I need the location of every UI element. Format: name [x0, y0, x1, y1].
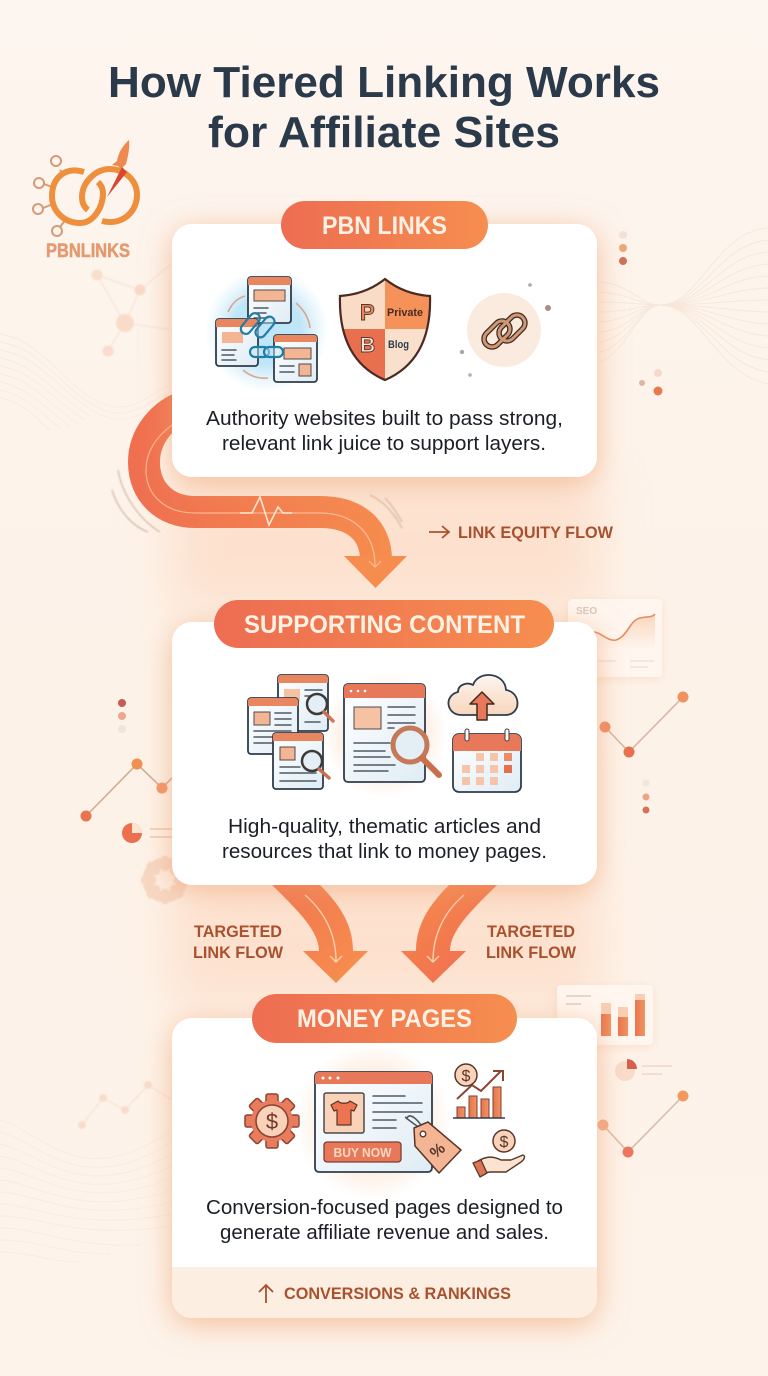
label: targeted link flow left: [193, 922, 284, 962]
logo: network nodes: [33, 156, 66, 236]
arrow: link equity flow from PBN links to supporting content: [112, 404, 407, 588]
icon: hand with coin: [473, 1130, 524, 1177]
icon: stacked articles with magnifiers: [248, 675, 333, 789]
text: money pages description: generate affiliate revenue and sales.: [220, 1222, 549, 1244]
icon: private blog shield: P: [360, 300, 375, 325]
label: targeted link flow right: TARGETED: [487, 922, 575, 941]
panel: PBN links: [172, 201, 597, 477]
icon: product page with buy now button: [295, 1044, 451, 1200]
icon: hand with coin: $: [500, 1134, 509, 1151]
text: money pages description: Conversion-focused pages designed to: [206, 1197, 563, 1219]
text: PBN links description: Authority websites built to pass strong,: [206, 408, 563, 430]
icon: calendar: [453, 729, 521, 792]
heading pill: supporting content: [214, 600, 554, 648]
arrow: pulse line: [240, 497, 292, 525]
icon: gear with dollar: $: [266, 1109, 278, 1134]
icon: linked website network: [205, 268, 329, 392]
footer: conversions and rankings: CONVERSIONS & RANKINGS: [284, 1284, 511, 1303]
arrow: motion lines: [112, 470, 402, 532]
panel: money pages: [172, 994, 597, 1318]
text: money pages description: [206, 1197, 563, 1244]
text: PBN links description: [206, 408, 563, 455]
heading pill: money pages: [252, 994, 517, 1043]
logo: rocket: [107, 140, 129, 197]
panel: supporting content: [172, 600, 597, 885]
decoration: upper-right wave mesh: [600, 228, 768, 384]
card background: [172, 224, 597, 477]
decoration: upper-right dots: [619, 231, 662, 396]
logo: PBNLINKS: [33, 140, 137, 262]
heading pill: PBN links: PBN LINKS: [322, 212, 447, 240]
label: link equity flow: LINK EQUITY FLOW: [458, 523, 614, 542]
card background: [172, 622, 597, 885]
background glow between panels: [170, 480, 600, 1005]
icon: private blog shield: B: [360, 334, 375, 357]
icon: product page with buy now button: BUY NOW: [334, 1146, 392, 1160]
decoration: lower-right line chart: [598, 1090, 688, 1158]
decoration: middle-right dots: [642, 780, 650, 814]
footer band: [172, 1267, 597, 1318]
icon: revenue bar chart: [453, 1064, 505, 1118]
decoration: middle-left dots: [118, 699, 126, 733]
text: supporting content description: resources that link to money pages.: [222, 841, 547, 863]
icon: chain link in circle: [460, 283, 551, 377]
icon: private blog shield: Private: [387, 307, 423, 319]
heading pill: PBN links: [281, 201, 488, 249]
card background: [172, 1018, 597, 1318]
decoration: faded network nodes: [92, 265, 172, 356]
arrow: curved body: [144, 404, 376, 560]
decoration: lower-left faded line chart: [78, 1081, 172, 1129]
arrow: head: [344, 556, 407, 588]
icon: gear with dollar: [245, 1094, 299, 1148]
label: targeted link flow left: LINK FLOW: [193, 943, 284, 962]
text: supporting content description: High-quality, thematic articles and: [228, 816, 541, 838]
icon: main article with magnifier: [323, 673, 447, 797]
decoration: faded gear: [141, 856, 189, 904]
decoration: lower-left wave mesh: [0, 1120, 172, 1262]
title: How Tiered Linking Works: [108, 58, 660, 107]
title: for Affiliate Sites: [208, 108, 560, 157]
heading pill: money pages: MONEY PAGES: [297, 1005, 472, 1033]
decoration: lower-right bar chart card: [557, 985, 653, 1045]
icon: revenue bar chart: $: [462, 1068, 471, 1085]
title: [108, 58, 660, 157]
decoration: left line chart: [80, 758, 180, 822]
decoration: right line chart: [600, 692, 688, 758]
text: PBN links description: relevant link juice to support layers.: [222, 433, 546, 455]
text: supporting content description: [222, 816, 547, 863]
logo: interlocked rings: [52, 169, 137, 223]
arrow: targeted link flow right: [401, 885, 497, 983]
icon: percent price tag: %: [427, 1140, 449, 1162]
icon: percent price tag: [406, 1116, 461, 1173]
decoration: left pie chart: [122, 823, 172, 843]
arrow: inner highlight: [146, 425, 381, 567]
decoration: upper-left wave mesh: [0, 334, 172, 430]
icon: cloud upload: [448, 675, 518, 720]
icon: private blog shield: Blog: [388, 339, 409, 351]
label: targeted link flow right: LINK FLOW: [486, 943, 577, 962]
decoration: SEO mini chart card: SEO: [576, 606, 597, 617]
heading pill: supporting content: SUPPORTING CONTENT: [244, 611, 525, 639]
decoration: lower-right pie chart: [615, 1059, 672, 1081]
logo: wordmark: PBNLINKS: [46, 241, 130, 262]
arrow: targeted link flow left: [272, 885, 368, 983]
label: targeted link flow left: TARGETED: [194, 922, 282, 941]
label: targeted link flow right: [486, 922, 577, 962]
icon: private blog shield: [338, 278, 432, 382]
decoration: SEO mini chart card: [568, 599, 662, 677]
